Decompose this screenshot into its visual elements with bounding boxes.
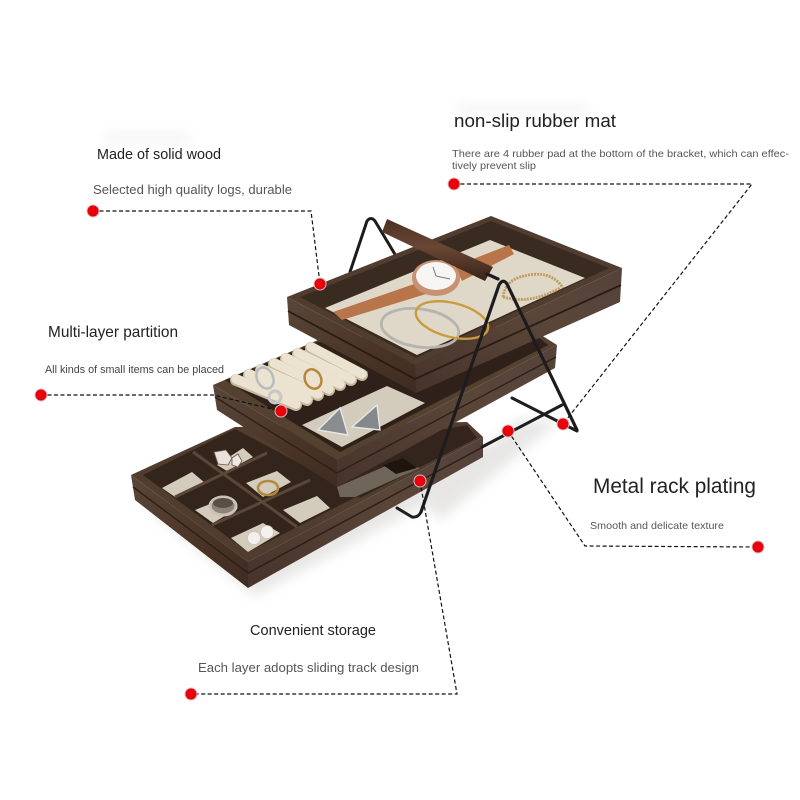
callout: rubber mat	[452, 111, 790, 172]
top tray	[287, 216, 622, 393]
ring display rolls	[230, 345, 368, 407]
callout: storage	[198, 623, 419, 675]
callout: solid wood: Made of solid wood	[97, 147, 221, 163]
callout leader lines	[41, 184, 758, 694]
callout: partition: All kinds of small items can be placed	[45, 364, 224, 376]
callout: metal rack	[590, 475, 756, 532]
bangles	[379, 295, 492, 352]
callout: solid wood: Selected high quality logs, durable	[93, 182, 292, 197]
callout: storage: Convenient storage	[250, 623, 376, 639]
callout: storage: Each layer adopts sliding track design	[198, 660, 419, 675]
callout: metal rack: Smooth and delicate texture	[590, 520, 724, 532]
callout: rubber mat: non-slip rubber mat	[454, 111, 616, 131]
top tray linen floor	[325, 240, 585, 355]
callout: partition	[45, 324, 224, 376]
callout: rubber mat: tively prevent slip	[452, 160, 536, 172]
triangle earrings	[318, 405, 380, 435]
callout: partition: Multi-layer partition	[48, 324, 178, 341]
callout: rubber mat: There are 4 rubber pad at the bottom of the bracket, which can effec-	[452, 148, 790, 160]
tray shadow	[150, 420, 560, 596]
compartment dividers	[175, 452, 310, 527]
callout: solid wood	[93, 147, 292, 197]
bottom tray	[131, 422, 483, 588]
callout: metal rack: Metal rack plating	[593, 475, 756, 498]
small jewelry in compartments	[210, 450, 278, 544]
wooden handle	[382, 219, 493, 281]
front metal frame	[421, 274, 577, 512]
compartment floors	[162, 448, 330, 552]
earring compartment floor	[302, 386, 425, 447]
middle tray	[213, 325, 557, 497]
callout dots	[35, 178, 764, 700]
metal stand rear feet	[397, 398, 577, 517]
rings on rolls	[253, 365, 324, 403]
rear handle frame	[350, 218, 396, 272]
chain bracelet	[503, 274, 563, 300]
watch	[333, 245, 514, 320]
